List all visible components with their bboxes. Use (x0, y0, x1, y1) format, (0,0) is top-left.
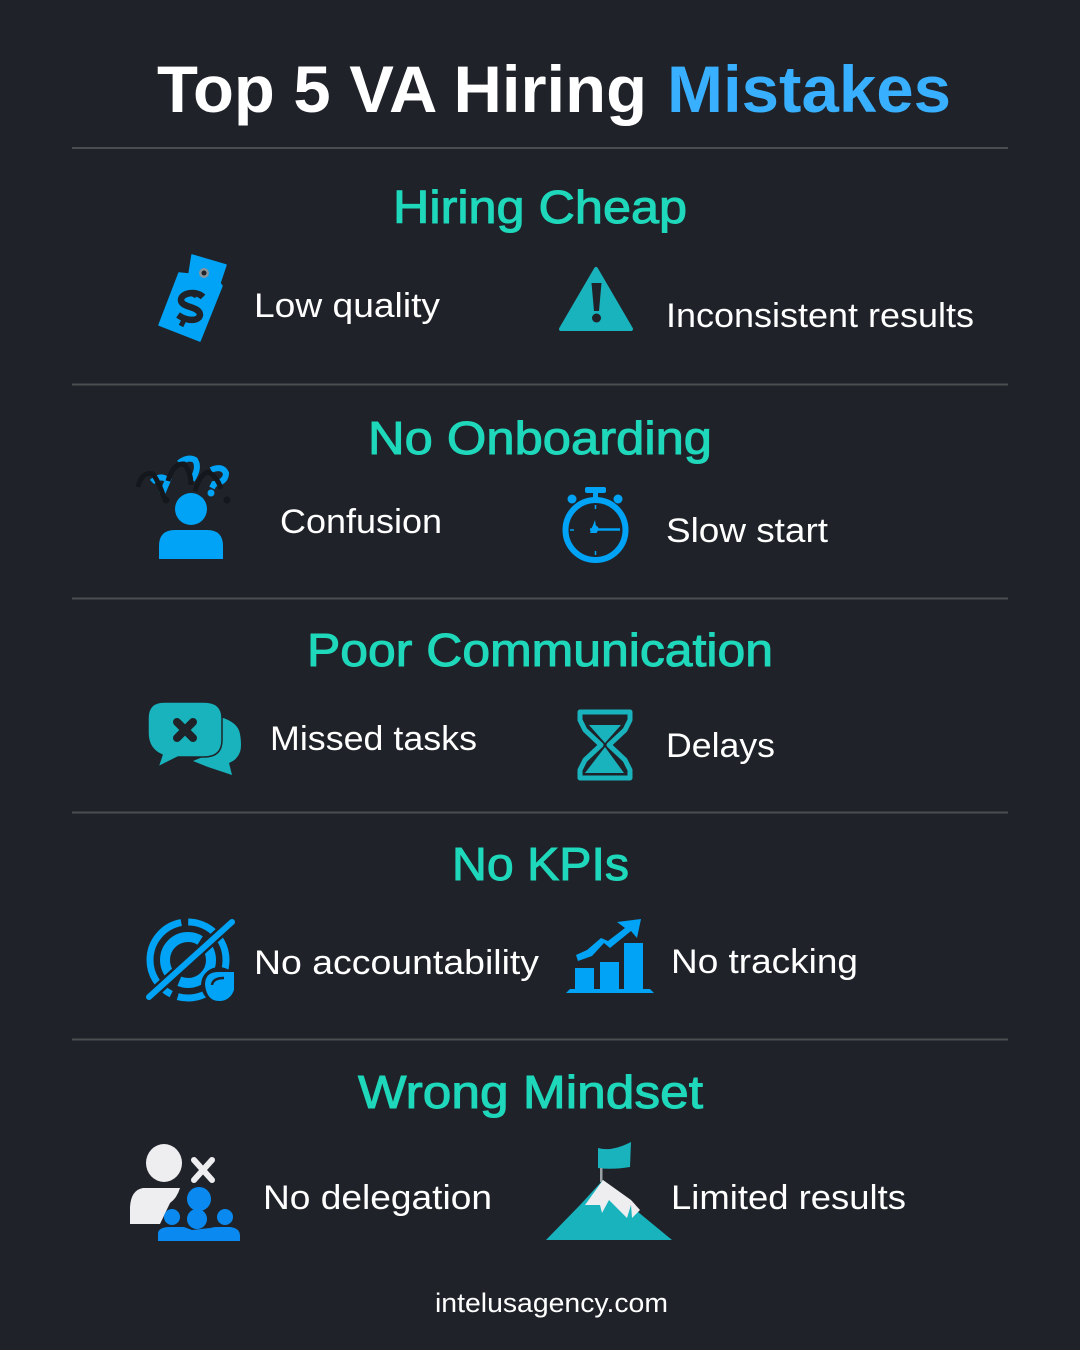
heading: hiring cheap: Hiring Cheap (393, 181, 687, 233)
text: inconsistent results: Inconsistent results (666, 297, 974, 335)
panel: hiring cheap (159, 181, 974, 341)
panel: poor communication (148, 624, 775, 778)
heading: poor communication: Poor Communication (307, 624, 773, 676)
title: Top 5 VA Hiring (157, 52, 647, 126)
icon: mountain with flag (546, 1142, 672, 1240)
panel: no onboarding (138, 412, 829, 560)
text: no delegation: No delegation (263, 1179, 492, 1217)
icon: price tag (159, 255, 226, 341)
icon: stopwatch (566, 487, 626, 560)
icon: crossed target (148, 920, 237, 1003)
icon: warning triangle (561, 269, 631, 329)
text: slow start: Slow start (666, 512, 829, 550)
text: delays: Delays (666, 727, 775, 765)
icon: rising bar chart (566, 919, 654, 993)
heading: no onboarding: No Onboarding (368, 412, 712, 464)
heading: no kpis: No KPIs (452, 838, 629, 890)
text: missed tasks: Missed tasks (270, 720, 477, 758)
icon: no delegation people (130, 1144, 240, 1241)
text: no accountability: No accountability (254, 944, 539, 982)
icon: chat bubbles with x (148, 702, 241, 775)
text: low quality: Low quality (254, 287, 440, 325)
icon: hourglass (580, 712, 630, 778)
icon: confused person (138, 459, 230, 559)
panel: no kpis (148, 838, 858, 1003)
panel: wrong mindset (130, 1066, 906, 1241)
footer website: intelusagency.com (435, 1288, 668, 1318)
heading: wrong mindset: Wrong Mindset (358, 1066, 703, 1118)
text: confusion: Confusion (280, 503, 442, 541)
title: Mistakes (667, 52, 951, 126)
text: no tracking: No tracking (671, 943, 858, 981)
text: limited results: Limited results (671, 1179, 906, 1217)
title (157, 52, 951, 126)
